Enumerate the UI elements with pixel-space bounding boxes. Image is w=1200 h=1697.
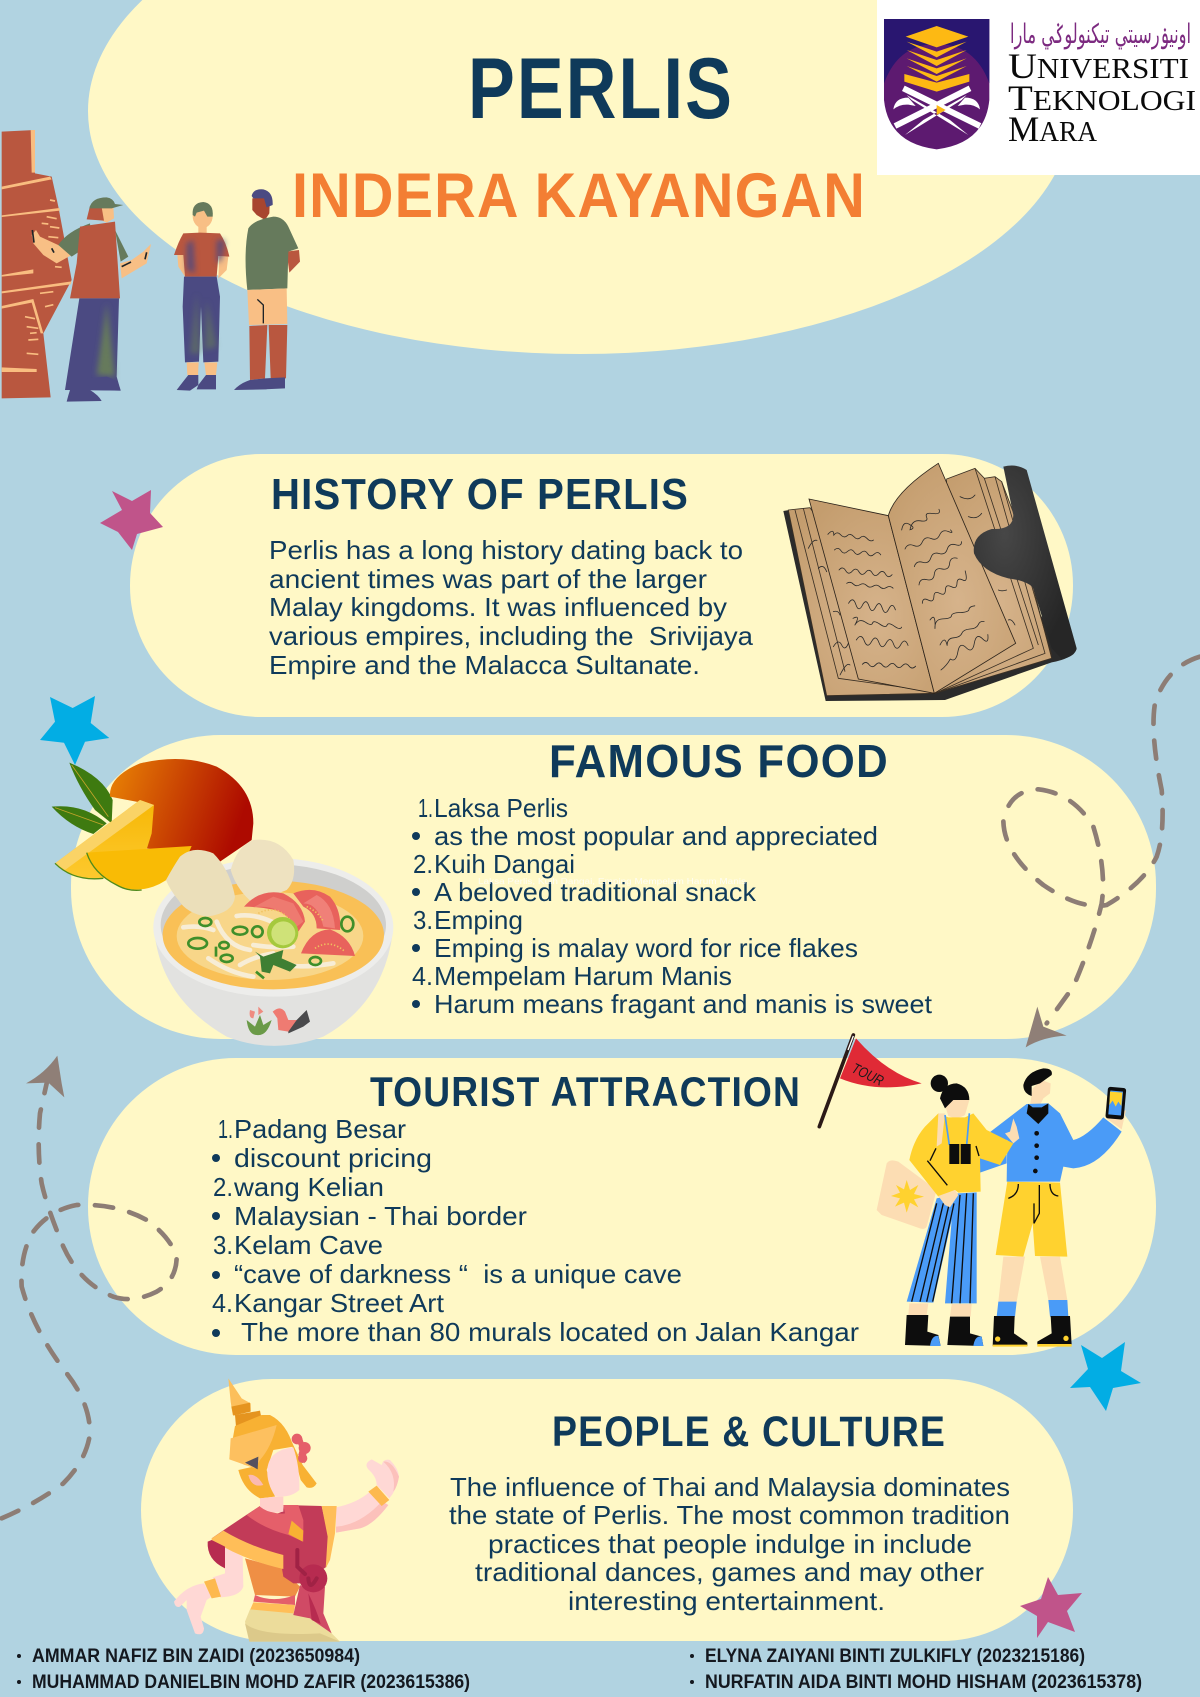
list: famous food bbox=[412, 793, 933, 1019]
dancer right arm bbox=[336, 1459, 399, 1533]
team names: right: ELYNA ZAIYANI BINTI ZULKIFLY (2023215186) bbox=[705, 1646, 1085, 1667]
star: blue upper bbox=[40, 696, 109, 765]
panel: famous food bbox=[52, 735, 1156, 1046]
dashed path: left arrow bbox=[2, 1056, 177, 1518]
dancer costume top bbox=[208, 1505, 337, 1633]
logo wordmark: UNIVERSITI bbox=[1008, 46, 1189, 86]
header blob bbox=[88, 0, 1072, 354]
logo: UiTM bbox=[877, 0, 1200, 175]
text block: people and culture bbox=[449, 1472, 1010, 1616]
panel: people and culture bbox=[141, 1378, 1073, 1642]
list: famous food: 3. bbox=[413, 905, 433, 935]
illustration: tourists with flag bbox=[819, 1035, 1126, 1347]
list: famous food: Mempelam Harum Manis bbox=[434, 961, 732, 991]
text block: people and culture: practices that people indulge in include bbox=[488, 1529, 972, 1559]
text block: history: Malay kingdoms. It was influenced by bbox=[269, 592, 727, 622]
list: famous food: Emping is malay word for rice flakes bbox=[434, 933, 858, 963]
text block: history: ancient times was part of the larger bbox=[269, 564, 707, 594]
list: famous food: Kuih Dangai bbox=[434, 849, 575, 879]
dancer head and crown bbox=[228, 1378, 317, 1513]
team names: left: AMMAR NAFIZ BIN ZAIDI (2023650984) bbox=[32, 1646, 360, 1667]
list: tourist attraction: The more than 80 murals located on Jalan Kangar bbox=[241, 1317, 859, 1347]
list: tourist attraction: discount pricing bbox=[234, 1143, 432, 1173]
person: right bbox=[234, 189, 300, 390]
list: famous food: Emping bbox=[434, 905, 523, 935]
list: tourist attraction: wang Kelian bbox=[233, 1172, 384, 1202]
illustration: mango and laksa bowl bbox=[52, 759, 393, 1046]
text block: history: Empire and the Malacca Sultanate. bbox=[269, 650, 700, 680]
dancer left arm bbox=[174, 1547, 243, 1634]
heading: famous food: FAMOUS FOOD bbox=[549, 735, 889, 787]
panel: tourist attraction bbox=[88, 1035, 1156, 1355]
list: famous food: A beloved traditional snack bbox=[434, 877, 757, 907]
text block: people and culture: traditional dances, games and may other bbox=[475, 1557, 984, 1587]
list: tourist attraction: Malaysian - Thai border bbox=[234, 1201, 527, 1231]
panel: history bbox=[130, 454, 1077, 717]
text block: history bbox=[269, 535, 754, 680]
illustration: Thai dancer bbox=[174, 1378, 399, 1642]
list: tourist attraction: 2. bbox=[213, 1172, 233, 1202]
star: pink upper bbox=[100, 490, 163, 550]
bowl motif: rooster bbox=[247, 1007, 310, 1035]
handwriting lines bbox=[808, 495, 1015, 675]
list: tourist attraction: 3. bbox=[213, 1230, 233, 1260]
person: guide with cap bbox=[32, 197, 151, 402]
text block: people and culture: interesting entertainment. bbox=[568, 1586, 885, 1616]
list: tourist attraction: Kelam Cave bbox=[234, 1230, 383, 1260]
title: Perlis: PERLIS bbox=[468, 41, 734, 137]
faint caption: Laksa Perlis, Kuih Dangai, Emping Mempelam Harum Manis bbox=[478, 877, 746, 886]
team names: left: MUHAMMAD DANIELBIN MOHD ZAFIR (2023615386) bbox=[32, 1672, 470, 1693]
list: famous food: 2. bbox=[413, 849, 433, 879]
icon: tour flag: TOUR bbox=[849, 1061, 886, 1090]
illustration: hikers at rock bbox=[2, 130, 300, 402]
text block: history: various empires, including the Srivijaya bbox=[269, 621, 754, 651]
icon: laksa bowl bbox=[153, 840, 393, 1046]
dancer skirt and waist bbox=[245, 1558, 340, 1642]
heading: people and culture: PEOPLE & CULTURE bbox=[552, 1408, 946, 1456]
list: tourist attraction: Kangar Street Art bbox=[234, 1288, 445, 1318]
team names: left bbox=[17, 1646, 470, 1693]
icon: UiTM shield bbox=[884, 19, 989, 149]
person: centre bbox=[174, 202, 229, 391]
list: famous food: Laksa Perlis bbox=[434, 793, 568, 823]
star: pink lower bbox=[1020, 1577, 1082, 1638]
text block: people and culture: the state of Perlis. The most common tradition bbox=[449, 1500, 1010, 1530]
rock wall bbox=[2, 130, 72, 398]
heading: tourist attraction: TOURIST ATTRACTION bbox=[370, 1068, 801, 1115]
logo wordmark: MARA bbox=[1008, 109, 1098, 149]
list: famous food: as the most popular and appreciated bbox=[434, 821, 878, 851]
dashed path: right arrow bbox=[1003, 657, 1200, 1047]
text block: history: Perlis has a long history dating back to bbox=[269, 535, 743, 565]
list: tourist attraction: “cave of darkness “ is a unique cave bbox=[234, 1259, 682, 1289]
team names: right bbox=[690, 1646, 1142, 1693]
heading: history: HISTORY OF PERLIS bbox=[271, 470, 689, 519]
list: famous food: 1. bbox=[418, 793, 433, 823]
person: man with phone bbox=[980, 1068, 1126, 1347]
illustration: old book bbox=[783, 463, 1077, 701]
logo wordmark bbox=[1008, 19, 1196, 149]
list: tourist attraction: Padang Besar bbox=[234, 1114, 406, 1144]
team names: right: NURFATIN AIDA BINTI MOHD HISHAM (2023615378) bbox=[705, 1672, 1142, 1693]
list: famous food: Harum means fragant and manis is sweet bbox=[434, 989, 933, 1019]
list: tourist attraction: 1. bbox=[218, 1114, 233, 1144]
star: blue lower bbox=[1070, 1342, 1141, 1411]
icon: mango bbox=[52, 759, 253, 890]
icon: tour flag bbox=[819, 1035, 922, 1127]
text block: people and culture: The influence of Thai and Malaysia dominates bbox=[450, 1472, 1010, 1502]
person: woman with binoculars bbox=[877, 1075, 1019, 1346]
list: tourist attraction bbox=[212, 1114, 859, 1347]
subtitle: Indera Kayangan: INDERA KAYANGAN bbox=[292, 161, 866, 231]
logo wordmark: TEKNOLOGI bbox=[1008, 78, 1196, 118]
list: famous food: 4. bbox=[412, 961, 433, 991]
list: tourist attraction: 4. bbox=[212, 1288, 233, 1318]
